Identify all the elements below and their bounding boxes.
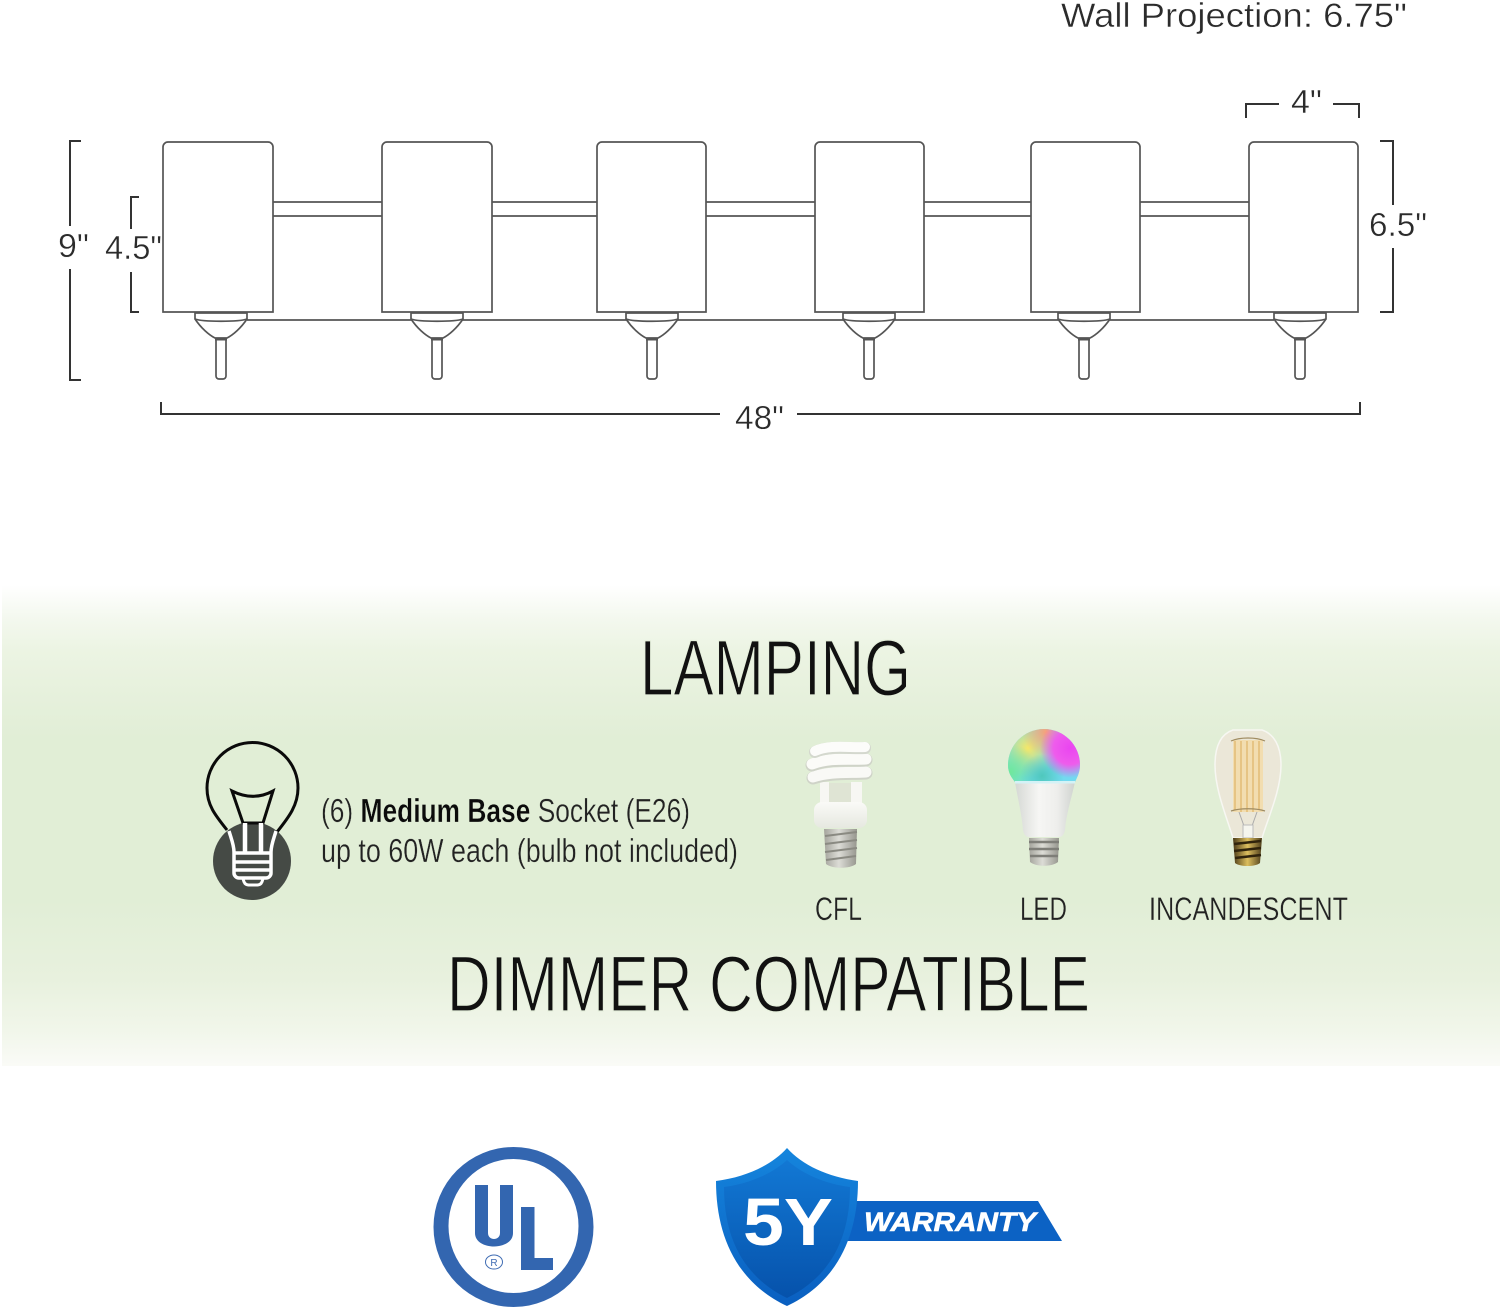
badge: 5 year warranty: WARRANTY [864, 1207, 1039, 1237]
icon: vintage incandescent bulb [1215, 730, 1281, 866]
dimension: 48 inch width: 48" [735, 399, 784, 436]
heading: dimmer compatible: DIMMER COMPATIBLE [447, 940, 1090, 1028]
label: LED: LED [1020, 891, 1067, 927]
dimension: 4 inch shade width: 4" [1291, 83, 1322, 120]
fixture line drawing [163, 142, 1358, 379]
heading: lamping: LAMPING [640, 624, 911, 712]
dimension: 9 inch height [58, 141, 89, 380]
dimension: 6.5 inch shade height [1369, 141, 1427, 312]
socket specification text: (6) Medium Base Socket (E26) [321, 792, 690, 829]
upper crossbar segments [273, 202, 1249, 216]
dimension: 4 inch shade width [1246, 83, 1359, 120]
dimension: 6.5 inch shade height: 6.5" [1369, 206, 1427, 243]
socket cups and stems [195, 313, 1326, 379]
panel: lamping band [2, 585, 1500, 1066]
icon: light bulb with base [207, 742, 298, 900]
badge: 5 year warranty: 5Y [743, 1185, 833, 1260]
socket specification text: up to 60W each (bulb not included) [321, 832, 738, 869]
dimension: 9 inch height: 9" [58, 227, 89, 264]
dimension: 48 inch width [161, 399, 1360, 436]
lower backplate rod [247, 319, 1274, 321]
badge: UL certification: R [490, 1258, 498, 1269]
dimension: 4.5 inch [105, 197, 162, 312]
label: incandescent: INCANDESCENT [1149, 891, 1348, 927]
socket specification text [321, 792, 738, 869]
badge: 5 year warranty [716, 1148, 1062, 1306]
badge: UL certification [434, 1147, 594, 1307]
icon: colour LED bulb [1008, 729, 1080, 866]
dimension: 4.5 inch: 4.5" [105, 229, 162, 266]
glass shades [163, 142, 1358, 312]
label: CFL: CFL [815, 891, 862, 927]
icon: CFL spiral bulb [812, 747, 867, 868]
